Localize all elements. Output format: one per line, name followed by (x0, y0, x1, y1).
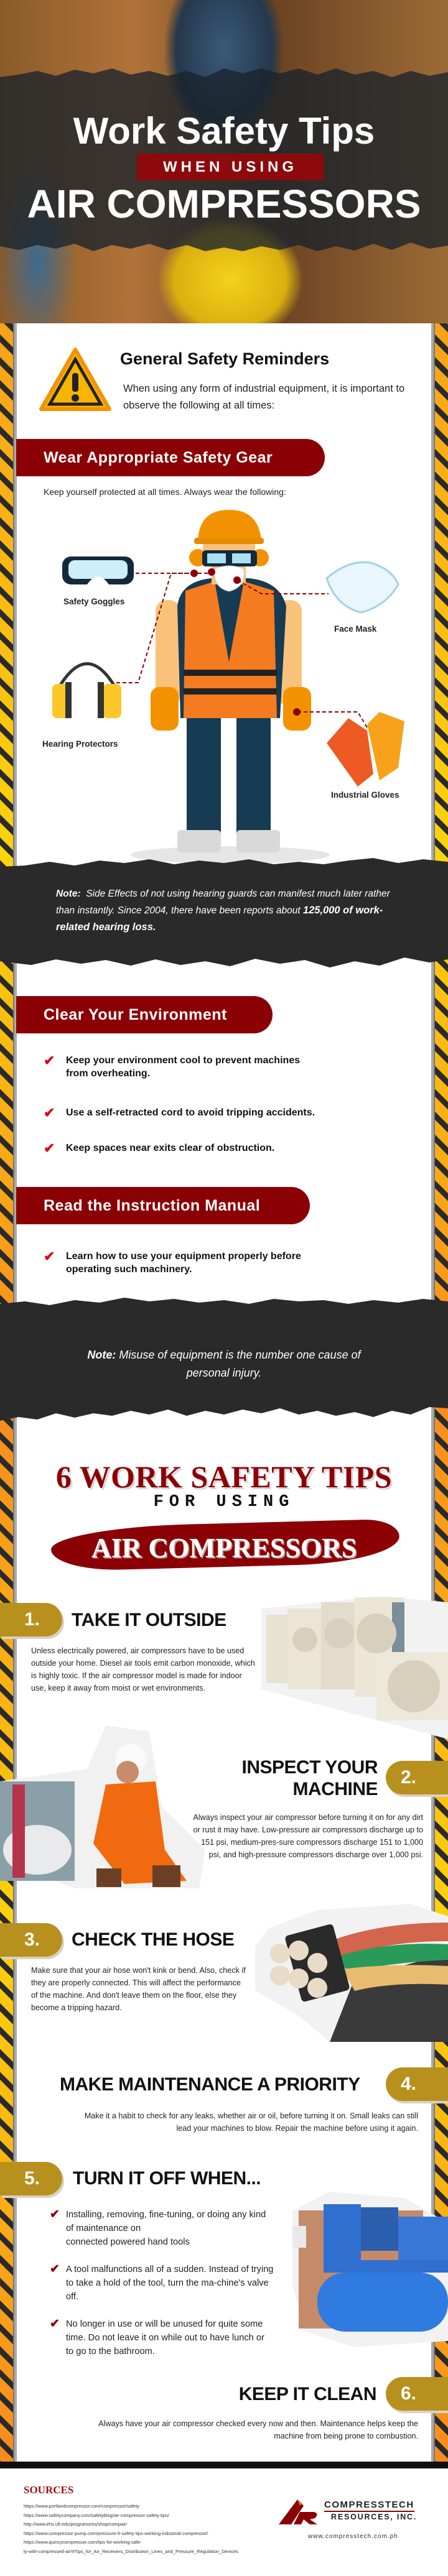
check item 1 (44, 1053, 300, 1079)
hero torn dark band (0, 68, 448, 251)
logo mark (279, 2500, 317, 2524)
tip 2 title: MACHINE (292, 1779, 378, 1799)
tip 3 text: Make sure that your air hose won't kink or bend. Also, check if they are properly connected. This will affect the performance of the machine. And don't leave them on the floor, else they become a tripping hazard. (31, 1966, 246, 2012)
title: 6 work safety tips: AIR COMPRESSORS (91, 1533, 357, 1563)
illustration: worker with gear (52, 510, 404, 863)
bullet 2: A tool malfunctions all of a sudden. Instead of trying to take a hold of the tool, turn the ma-chine's valve off. (66, 2264, 273, 2302)
text: keep protected: Keep yourself protected at all times. Always wear the following: (44, 487, 286, 497)
tip 4 title: MAKE MAINTENANCE A PRIORITY (60, 2074, 360, 2095)
check item: learn: ✔ (44, 1249, 55, 1264)
heading bar: wear safety gear (16, 439, 325, 476)
heading bar: clear environment: Clear Your Environment (44, 1006, 227, 1023)
logo text: COMPRESSTECH (324, 2500, 414, 2510)
note: misuse (87, 1349, 362, 1379)
badge 6: 6. (401, 2383, 416, 2404)
icon: warning sign (39, 348, 111, 411)
badge 1 (0, 1603, 62, 1637)
tip 6 (98, 2377, 448, 2440)
heading bar: clear environment (16, 996, 273, 1033)
tip 5 (0, 2162, 273, 2357)
badge 4: 4. (401, 2074, 416, 2094)
check item 2: ✔ (44, 1105, 55, 1120)
heading bar: instruction manual (16, 1187, 310, 1224)
check item 2: Use a self-retracted cord to avoid tripping accidents. (66, 1107, 315, 1118)
badge 3 (0, 1923, 62, 1957)
labels: gear (42, 597, 399, 800)
bullet 1 (50, 2208, 266, 2247)
badge 2: 2. (401, 1767, 416, 1788)
title: 6 work safety tips (51, 1459, 399, 1569)
dark note band 1 (0, 858, 448, 967)
check item: learn: operating such machinery. (66, 1264, 192, 1275)
bullet 3: ✔ (50, 2317, 60, 2330)
badge 1: 1. (24, 1609, 40, 1630)
title line 2 banner: WHEN USING (163, 159, 297, 175)
badge 3: 3. (24, 1929, 40, 1950)
bullet 1: connected powered hand tools (66, 2237, 190, 2247)
tip 6 title: KEEP IT CLEAN (239, 2384, 376, 2404)
image: worker inspecting (0, 1725, 205, 1888)
note: misuse: personal injury. (187, 1367, 261, 1379)
hero photo background (0, 0, 448, 323)
side hazard stripes (0, 323, 13, 2468)
title line: 6 work safety tips: 6 WORK SAFETY TIPS (56, 1459, 392, 1494)
sources heading: SOURCES (24, 2484, 73, 2496)
tip 1 (0, 1603, 255, 1692)
check item: learn (44, 1249, 301, 1275)
sources list: https://www.portlandcompressor.com/compressor/safety (24, 2503, 139, 2509)
sources list: https://www.quincycompressor.com/tips-for-working-safe- (24, 2539, 142, 2545)
logo: compresstech: RESOURCES, INC. (331, 2513, 417, 2521)
check item 1: ✔ (44, 1053, 55, 1068)
badge 5: 5. (24, 2168, 40, 2189)
tip 2 (193, 1757, 448, 1859)
logo website: www.compresstech.com.ph (308, 2533, 398, 2540)
title line 3: AIR COMPRESSORS (27, 182, 421, 226)
image: blue compressor (292, 2192, 448, 2347)
heading: general safety reminders: General Safety Reminders (120, 349, 329, 368)
bullet 2: ✔ (50, 2263, 60, 2276)
badge 5 (0, 2162, 62, 2195)
note: hearing loss: Note: Side Effects of not using hearing guards can manifest much later rather than instantly. Since 2004, there have been reports about 125,000 of work-related hearing loss. (56, 889, 390, 933)
title line 2 banner (137, 154, 324, 180)
bullet 3: No longer in use or will be unused for quite some time. Do not leave it on while out to have lunch or to go to the bathroom. (66, 2319, 264, 2357)
sources list: http://www.ehs.ufl.edu/programs/os/shop/compair/ (24, 2521, 127, 2527)
tip 6 text: Always have your air compressor checked every now and then. Maintenance helps keep the machine from being prone to combustion. (98, 2419, 418, 2440)
tip 4 text: Make it a habit to check for any leaks, whether air or oil, before turning it on. Small leaks can still lead your machines to blow. Repair the machine before using it again. (85, 2112, 418, 2133)
check item 1: Keep your environment cool to prevent machines (66, 1055, 300, 1066)
label: safety goggles: Safety Goggles (63, 597, 124, 606)
title line 1: Work Safety Tips (73, 110, 375, 152)
title (27, 110, 421, 226)
label: industrial gloves: Industrial Gloves (331, 790, 399, 800)
badge 4 (386, 2067, 448, 2101)
tip 2 title (241, 1757, 378, 1799)
tip 5 title: TURN IT OFF WHEN... (73, 2168, 261, 2189)
title line: for using: FOR USING (154, 1493, 294, 1512)
bullet 1: ✔ (50, 2208, 60, 2221)
sources list: https://www.safetycompany.com/safetyblog/air-compressor-safety-tips/ (24, 2513, 169, 2518)
footer black bar (0, 2462, 448, 2468)
label: hearing protectors: Hearing Protectors (42, 739, 118, 749)
check item 2 (44, 1105, 315, 1120)
sources (24, 2484, 238, 2554)
heading bar: wear safety gear: Wear Appropriate Safety Gear (44, 449, 273, 466)
text: intro: When using any form of industrial equipment, it is important to observe the following at all times: (123, 383, 404, 411)
check item 3 (44, 1140, 274, 1156)
tip 2 title: INSPECT YOUR (241, 1757, 378, 1778)
tip 1 title: TAKE IT OUTSIDE (72, 1610, 226, 1630)
checklist: environment (44, 1053, 315, 1156)
sources list: ly-with-compressed-air/#Tips_for_Air_Receivers_Distribution_Lines_and_Pressure_Regulation_Devices (24, 2549, 238, 2554)
tip 5 bullets (50, 2208, 273, 2357)
logo: compresstech (279, 2500, 417, 2540)
sources list (24, 2503, 238, 2554)
label: face mask: Face Mask (334, 624, 376, 634)
dark note band 2 (0, 1298, 448, 1421)
check item 3: ✔ (44, 1140, 55, 1156)
tip 3 title: CHECK THE HOSE (72, 1929, 234, 1950)
badge 2 (386, 1761, 448, 1794)
image: hose connector (255, 1904, 448, 2042)
check item 1: from overheating. (66, 1068, 150, 1079)
bullet 1: Installing, removing, fine-tuning, or doing any kind of maintenance on (66, 2210, 266, 2233)
tip 2 text: Always inspect your air compressor before turning it on for any dirt or rust it may have. Low-pressure air compressors discharge up to 151 psi, medium-pres-sure compressors discharge 151 to 1,000 psi, and high-pressure compressors discharge over 1,000 psi. (193, 1813, 423, 1859)
check item 3: Keep spaces near exits clear of obstruction. (66, 1143, 274, 1153)
image: AC outdoor units (261, 1596, 448, 1739)
badge 6 (386, 2377, 448, 2411)
tip 4 (60, 2067, 448, 2133)
note: misuse: Note: Misuse of equipment is the number one cause of (87, 1349, 361, 1361)
title brush banner (50, 1519, 400, 1571)
tip 1 text: Unless electrically powered, air compressors have to be used outside your home. Diesel air tools emit carbon monoxide, which is highly toxic. If the air compressor model is made for indoor use, keep it away from moist or wet environments. (31, 1646, 255, 1692)
check item: learn: Learn how to use your equipment properly before (66, 1251, 301, 1262)
heading bar: instruction manual: Read the Instruction Manual (44, 1197, 260, 1214)
tip 3 (0, 1923, 246, 2012)
sources list: https://www.compressor-pump.com/pressure-5-safety-tips-working-industrial-compressor/ (24, 2531, 208, 2536)
